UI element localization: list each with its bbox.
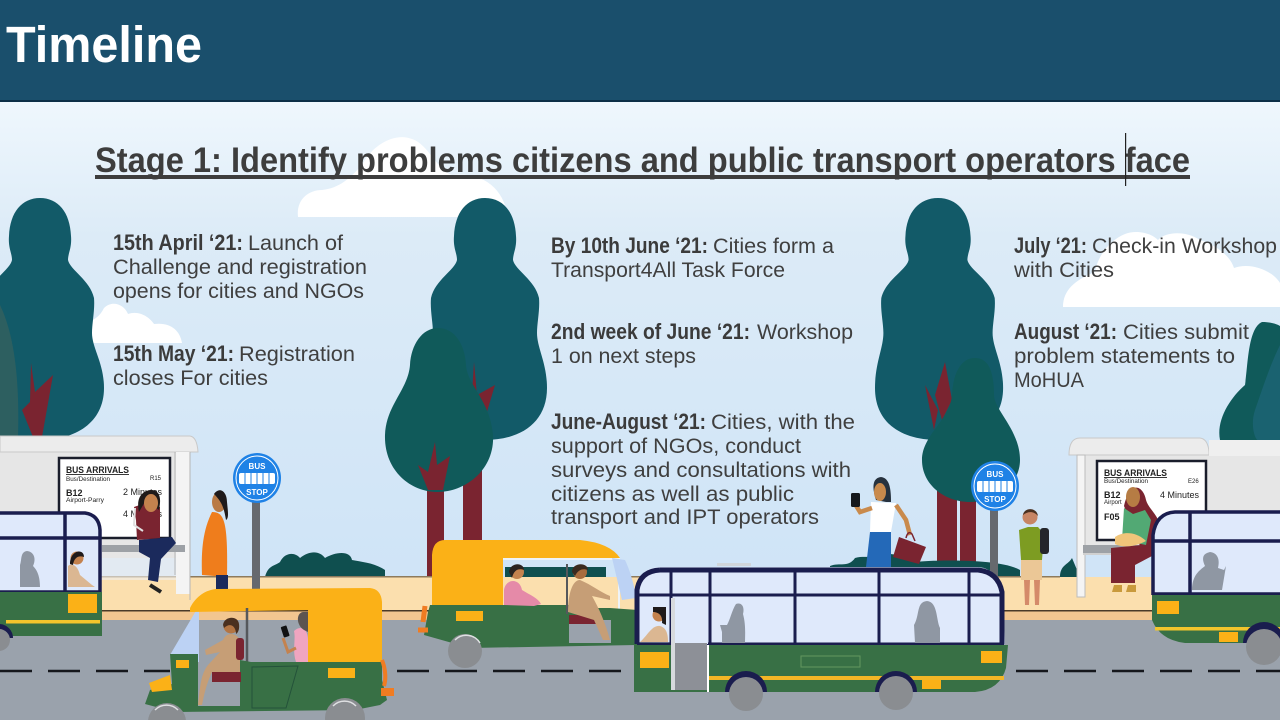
bus stop sign: right: STOP — [984, 495, 1006, 504]
arrivals board: B12 — [1104, 490, 1121, 500]
pavement — [0, 576, 1280, 621]
timeline text: right column: problem statements to — [1014, 344, 1235, 368]
timeline text: middle column: 1 on next steps — [551, 344, 696, 368]
timeline text: right column: Check-in Workshop — [1092, 234, 1277, 258]
cloud: left — [90, 304, 182, 343]
timeline text: left column: Registration — [239, 342, 355, 366]
driver — [640, 607, 668, 642]
arrivals board: BUS ARRIVALS — [66, 465, 129, 475]
sky background — [0, 102, 1280, 582]
arrivals board: Airport-Parry — [66, 498, 104, 504]
timeline text: middle column: Transport4All Task Force — [551, 258, 785, 282]
cloud: right — [1063, 232, 1280, 307]
timeline text: right column: with Cities — [1013, 258, 1114, 282]
bus shelter: left — [0, 436, 198, 600]
timeline text: middle column: Workshop — [757, 320, 853, 344]
arrivals board: 4 Minutes — [1160, 490, 1199, 500]
arrivals board — [59, 458, 170, 538]
timeline text: middle column — [551, 233, 855, 529]
tree: far right — [1219, 322, 1280, 440]
bus: left partial — [0, 512, 102, 651]
timeline text: left column: opens for cities and NGOs — [113, 279, 364, 303]
bus stop sign: right: BUS — [987, 470, 1004, 479]
arrivals board: F05 — [1104, 512, 1120, 522]
arrivals board: Airport — [1104, 500, 1122, 506]
person: woman on bench — [134, 490, 176, 592]
arrivals board: R15 — [150, 476, 162, 482]
bus: right partial — [1152, 511, 1280, 665]
timeline text: middle column: support of NGOs, conduct — [551, 434, 801, 458]
timeline text: left column: closes For cities — [113, 366, 268, 390]
heading: Stage 1: Identify problems citizens and public transport operators face — [95, 141, 1190, 180]
person: pregnant woman in orange — [202, 490, 228, 590]
arrivals board: E26 — [1188, 479, 1199, 485]
timeline text: middle column: June-August ‘21: — [551, 409, 706, 434]
road centre dashes — [0, 670, 1280, 672]
passenger in pink — [504, 564, 541, 606]
bus shelter: right — [1069, 438, 1280, 597]
tree: left large — [0, 198, 104, 440]
bus stop sign: left — [233, 453, 281, 590]
hedge: left — [265, 552, 385, 577]
timeline text: middle column: citizens as well as public — [551, 482, 794, 506]
timeline text: middle column: Cities, with the — [711, 410, 855, 434]
timeline text: middle column: Cities form a — [713, 234, 834, 258]
timeline text: middle column: By 10th June ‘21: — [551, 233, 708, 258]
timeline text: right column: July ‘21: — [1014, 233, 1087, 258]
silhouette passenger — [914, 601, 940, 643]
bus stop sign: right — [971, 461, 1019, 603]
arrivals board: Bus/Destination — [66, 477, 110, 483]
hedge: behind shelter — [1060, 558, 1080, 577]
text cursor — [1125, 133, 1126, 186]
silhouette passenger — [720, 603, 745, 643]
auto rickshaw: rear — [418, 540, 638, 668]
timeline text: middle column: 2nd week of June ‘21: — [551, 319, 750, 344]
title: Timeline — [6, 16, 202, 73]
bus: centre large — [634, 563, 1008, 711]
tree: centre small — [385, 328, 493, 580]
timeline text: middle column: surveys and consultations with — [551, 458, 851, 482]
hedge: right — [830, 552, 1020, 577]
arrivals board: 2 Minutes — [123, 487, 162, 497]
passenger with phone — [281, 612, 308, 662]
silhouette passenger — [20, 551, 40, 587]
auto rickshaw: front — [145, 588, 394, 720]
timeline text: left column: Launch of — [248, 231, 343, 255]
timeline text: middle column: transport and IPT operators — [551, 505, 819, 529]
timeline text: left column: 15th May ‘21: — [113, 341, 234, 366]
tree: centre large — [427, 198, 547, 575]
header band — [0, 0, 1280, 102]
tree: right small — [922, 358, 1020, 575]
arrivals board: B12 — [66, 488, 83, 498]
timeline text: right column — [1013, 233, 1277, 392]
arrivals board: 4 Minutes — [123, 509, 162, 519]
tree: right large — [875, 198, 1003, 575]
bus stop sign: left: STOP — [246, 488, 268, 497]
silhouette passenger — [1192, 552, 1226, 590]
bus stop sign: left: BUS — [249, 462, 266, 471]
arrivals board — [1097, 461, 1206, 540]
driver — [198, 618, 244, 705]
timeline text: right column: August ‘21: — [1014, 319, 1117, 344]
road — [0, 620, 1280, 720]
person: woman in green on bench — [1111, 487, 1160, 592]
arrivals board: Bus/Destination — [1104, 479, 1148, 485]
driver — [568, 564, 610, 640]
cloud: behind heading — [298, 137, 508, 217]
person: child with backpack — [1019, 509, 1049, 605]
timeline text: left column: 15th April ‘21: — [113, 230, 243, 255]
timeline text: right column: Cities submit — [1123, 320, 1249, 344]
arrivals board: BUS ARRIVALS — [1104, 468, 1167, 478]
timeline text: left column — [113, 230, 367, 390]
timeline text: right column: MoHUA — [1014, 368, 1085, 392]
driver — [68, 552, 95, 587]
person: woman with bag — [851, 477, 926, 567]
timeline text: left column: Challenge and registration — [113, 255, 367, 279]
